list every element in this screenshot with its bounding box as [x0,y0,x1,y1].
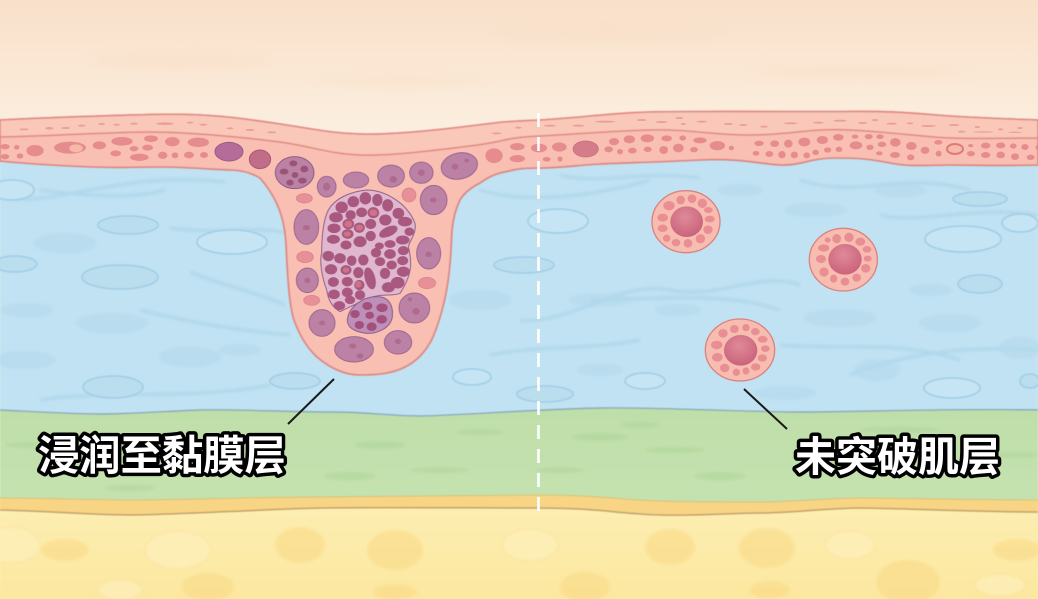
label: not breaching muscle layer: 未突破肌层 [795,434,1000,480]
leader line: right label [744,389,787,429]
yellow boundary band [0,495,1038,515]
cell nuclei [303,159,469,359]
blue submucosa layer [0,150,1038,416]
multi-nucleated cell [275,157,314,189]
pink small cells [296,188,436,305]
tissue ovals with strong outlines [0,180,1038,402]
upper background layer [0,0,1038,150]
tissue ovals, faint [0,184,1038,399]
green muscle layer [0,408,1038,505]
label: invading mucosa: 浸润至黏膜层 [38,433,286,479]
lower nested tumour cluster [347,297,392,333]
yellow fat layer [0,503,1038,599]
mucosa band and tumour bump [0,111,1038,375]
faint connective fibres [0,175,1038,400]
tumour invading the mucosa [275,149,480,362]
round cancer cell nest, upper left [652,191,720,253]
purple surrounding cells [294,149,480,362]
cells in mucosa band, middle [485,117,747,163]
round cancer cell nest, right [809,228,877,291]
cells in mucosa band, left [0,122,276,169]
white dashed divider [537,113,540,513]
large nested tumour cluster [321,190,415,312]
cells in mucosa band, right [753,119,1038,160]
leader line: left label [288,379,334,424]
round cancer cell nest, lower [705,319,775,381]
